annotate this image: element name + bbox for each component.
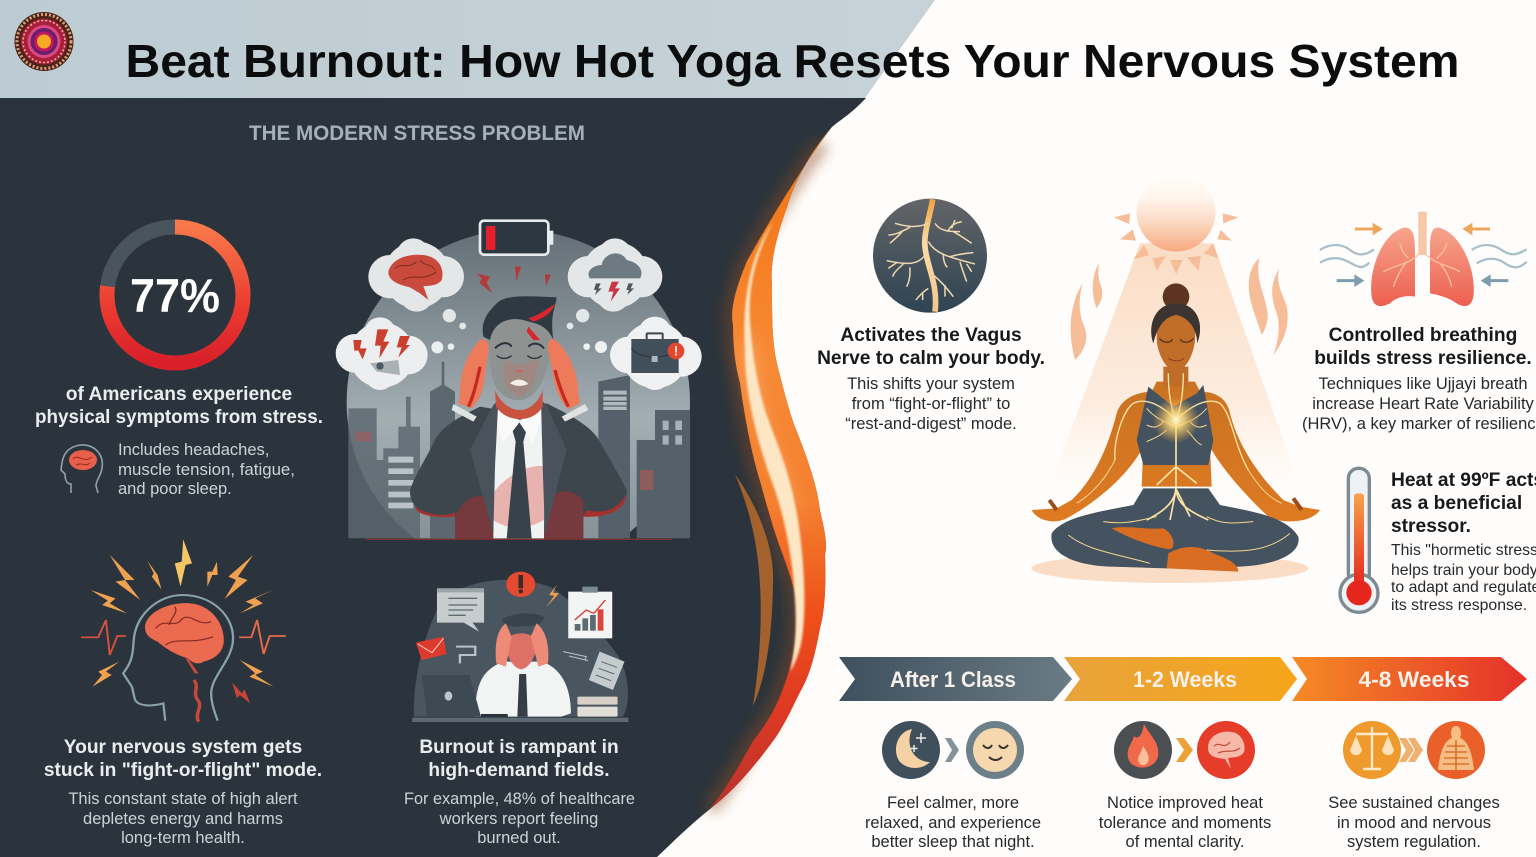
arrow: 4-8 weeks [1292,657,1527,701]
vagus text: This shifts your system [847,375,1015,393]
thought bubble: storm cloud [567,238,662,329]
arrow: 1-2 weeks [1064,657,1297,701]
figure: glowing nerve network [1068,373,1290,563]
symptoms text: Includes headaches, [118,441,269,459]
heat text: as a beneficial [1391,493,1522,514]
panel: vagus nerve [817,199,1045,433]
breathing text: increase Heart Rate Variability [1312,395,1535,413]
arrow: 1-2 weeks: 1-2 Weeks [1133,667,1237,692]
vagus text [817,325,1045,433]
light beam [1050,243,1300,487]
icon: balance scale [1343,721,1401,779]
heat wisps [1071,258,1288,360]
figure: crossed legs [1051,488,1299,572]
fight-or-flight text: This constant state of high alert [68,790,298,808]
symptoms text [118,441,295,498]
icon: vagus nerve circle [873,199,987,313]
outcome text: relaxed, and experience [865,814,1041,832]
icon: thermometer [1340,468,1378,612]
burnout text [404,737,635,847]
breathing text: builds stress resilience. [1314,348,1532,369]
burnout text: Burnout is rampant in [419,737,619,758]
burnout text: workers report feeling [439,810,598,828]
heat text: stressor. [1391,516,1471,537]
panel: 77% statistic [35,227,323,498]
fight-or-flight text: long-term health. [121,829,245,847]
title: Beat Burnout: How Hot Yoga Resets Your Nervous System [126,35,1460,87]
timeline stage: after 1 class [839,657,1072,851]
dark left panel [0,98,866,857]
arrow: after 1 class: After 1 Class [890,667,1016,692]
outcome text: better sleep that night. [871,833,1035,851]
ground shadow [1032,554,1308,583]
backdrop circle with skyline [346,234,690,538]
flame swoosh divider [710,127,832,809]
outcome text: of mental clarity. [1126,833,1244,851]
outcome text: Feel calmer, more [887,794,1019,812]
timeline stage: 4-8 weeks [1292,657,1527,851]
symptoms text: and poor sleep. [118,480,232,498]
arrow: 4-8 weeks: 4-8 Weeks [1358,667,1470,692]
panel: fight-or-flight [44,539,322,847]
panel: controlled breathing [1302,212,1536,433]
breathing text: Techniques like Ujjayi breath [1318,375,1528,393]
icon: brain [1197,721,1255,779]
heat text [1391,470,1536,614]
stat description [35,384,323,428]
panel: heat as beneficial stressor [1340,468,1536,614]
fight-or-flight text [44,737,322,847]
breathing text [1302,325,1536,433]
heat text: to adapt and regulate [1391,579,1536,596]
outcome text: See sustained changes [1328,794,1500,812]
outcome text [1328,794,1500,851]
red bolts below battery [477,267,551,293]
burnout text: For example, 48% of healthcare [404,790,635,808]
donut chart: 77% [107,227,243,363]
icon: spine [1427,721,1485,779]
outcome text: Notice improved heat [1107,794,1263,812]
fight-or-flight text: stuck in "fight-or-flight" mode. [44,760,322,781]
icon: calm face [966,721,1024,779]
icon: moon [882,721,940,779]
icon: overwhelmed worker at desk [412,572,628,722]
vagus text: from “fight-or-flight” to [852,395,1010,413]
stat description: physical symptoms from stress. [35,407,323,428]
symptoms text: muscle tension, fatigue, [118,461,295,479]
burnout text: high-demand fields. [428,760,610,781]
ground line [365,539,672,540]
logo: mandala [14,12,74,71]
icon: overloaded brain with bolts [81,539,286,722]
outcome text: tolerance and moments [1099,814,1271,832]
panel: burnout in high-demand fields [404,572,635,847]
thought bubble: brain [368,238,466,329]
chevron [945,738,959,762]
figure: arms and torso [1032,382,1320,521]
illustration: stressed man in city with thought clouds [336,221,702,573]
heat text: its stress response. [1391,597,1527,614]
vagus text: Activates the Vagus [840,325,1022,346]
stat description: of Americans experience [66,384,293,405]
icon: low battery [480,221,553,255]
thought bubble: lightning and gear [336,317,454,390]
vagus text: Nerve to calm your body. [817,348,1045,369]
burnout text: burned out. [477,829,561,847]
man: head and hands [452,296,588,422]
timeline stage: 1-2 weeks [1064,657,1297,851]
outcome text: system regulation. [1347,833,1481,851]
illustration: meditating figure under the sun [1032,173,1320,583]
vagus text: “rest-and-digest” mode. [845,415,1017,433]
icon: lungs with airflow [1320,212,1527,306]
outcome text: in mood and nervous [1337,814,1491,832]
chevron [1176,738,1193,762]
man: suit, shirt, tie [410,400,627,539]
chevrons [1399,738,1423,762]
heat text: helps train your body [1391,562,1536,579]
outcome text [1099,794,1271,851]
section heading: the modern stress problem: THE MODERN STRESS PROBLEM [249,122,585,145]
arrow: after 1 class [839,657,1072,701]
header band [0,0,935,98]
sun [1114,173,1238,274]
donut chart: 77%: 77% [130,269,220,322]
fight-or-flight text: depletes energy and harms [83,810,283,828]
icon: head with brain [61,445,102,493]
thought bubble: briefcase with alert [583,317,702,390]
outcome text [865,794,1041,851]
icon: flame [1114,721,1172,779]
figure: head [1151,283,1200,387]
fight-or-flight text: Your nervous system gets [64,737,302,758]
breathing text: Controlled breathing [1329,325,1517,346]
